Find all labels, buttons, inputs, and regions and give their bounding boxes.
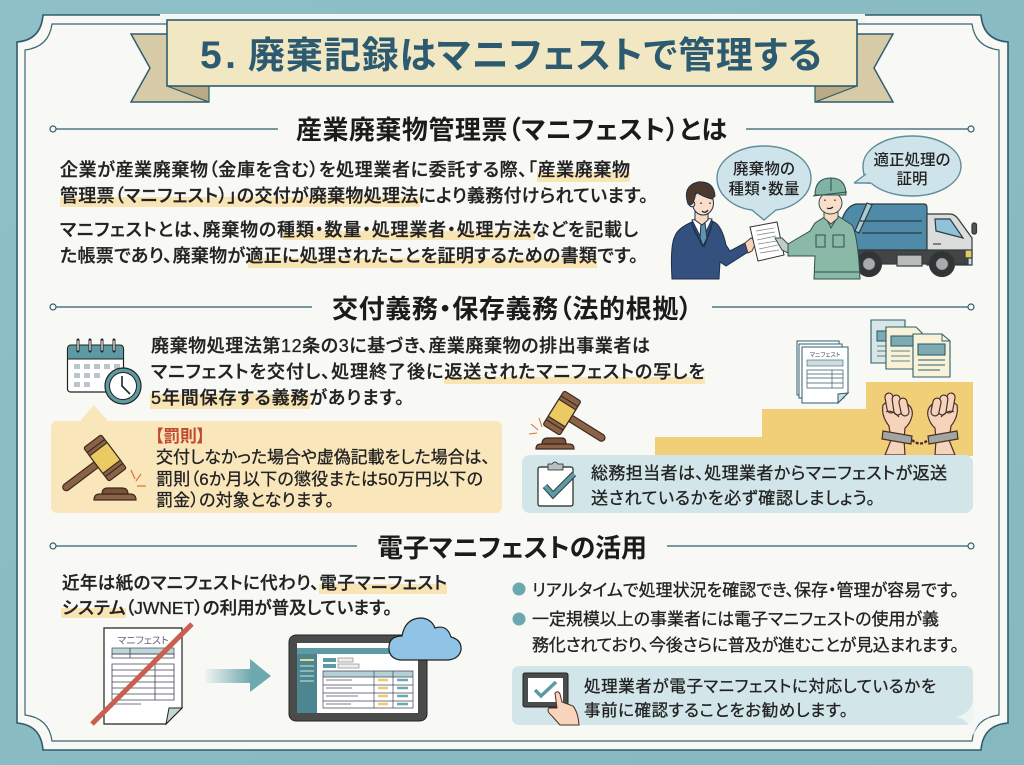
body text 3 <box>61 573 447 618</box>
section 3: electronic manifest <box>50 533 990 737</box>
icon: calendar and clock <box>68 340 141 404</box>
staircase <box>655 382 973 456</box>
penalty text: 罰金）の対象となります。 <box>156 491 334 510</box>
heading 1: 産業廃棄物管理票（マニフェスト）とは <box>296 115 727 145</box>
icon: manifest stack <box>797 341 848 403</box>
bullet list: 一定規模以上の事業者には電子マニフェストの使用が義 <box>532 609 939 629</box>
icon: manifest stack: マニフェスト <box>809 352 841 359</box>
right hand <box>928 392 957 455</box>
penalty text: 交付しなかった場合や虚偽記載をした場合は、 <box>156 448 490 467</box>
callout: penalty <box>51 405 502 513</box>
arrow <box>205 659 271 692</box>
heading 2 <box>50 294 974 324</box>
speech bubble: waste type and quantity: 種類・数量 <box>728 180 800 198</box>
callout: check contractor support: 処理業者が電子マニフェストに対応しているかを <box>584 677 936 696</box>
heading 3 <box>50 533 974 563</box>
icon: gavel (right) <box>529 391 615 456</box>
heading 1 <box>50 115 974 145</box>
body text 2 <box>150 336 705 409</box>
left hand <box>883 392 912 455</box>
speech bubble: proof of proper disposal: 証明 <box>896 170 928 188</box>
icon: handcuffed fists <box>882 392 958 455</box>
bullet list: リアルタイムで処理状況を確認でき、保存・管理が容易です。 <box>532 581 959 600</box>
penalty text: 【罰則】 <box>155 427 205 446</box>
body text 1: た帳票であり、廃棄物が適正に処理されたことを証明するための書類です。 <box>60 245 638 266</box>
illustration: garbage truck <box>841 203 976 276</box>
callout: check contractor support <box>512 666 973 725</box>
callout: confirm return <box>522 455 973 513</box>
speech bubble: proof of proper disposal <box>854 136 961 196</box>
illustration: handed-over document <box>750 222 784 261</box>
sparkle <box>956 697 990 737</box>
icon: gavel <box>51 435 146 506</box>
title text: 5. <box>200 34 236 77</box>
callout: check contractor support: 事前に確認することをお勧めします。 <box>584 701 848 720</box>
illustration: office worker <box>671 182 757 279</box>
heading 2: 交付義務・保存義務（法的根拠） <box>332 294 692 324</box>
body text 2: 廃棄物処理法第12条の3に基づき、産業廃棄物の排出事業者は <box>151 336 650 356</box>
icon: crossed-out paper manifest: マニフェスト <box>117 636 169 647</box>
body text 1 <box>60 159 648 268</box>
body text 2: 5年間保存する義務があります。 <box>151 387 404 408</box>
icon: documents <box>871 320 950 377</box>
icon: touch tablet <box>523 673 579 725</box>
penalty text: 罰則（6か月以下の懲役または50万円以下の <box>156 470 483 489</box>
body text 3: システム（JWNET）の利用が普及しています。 <box>62 598 392 618</box>
section 1: what is a manifest <box>50 115 976 279</box>
illustration: disposal contractor <box>775 178 860 279</box>
heading 3: 電子マニフェストの活用 <box>377 533 647 563</box>
title banner <box>131 20 893 102</box>
icon: crossed-out paper manifest <box>92 624 192 724</box>
speech bubble: waste type and quantity: 廃棄物の <box>733 160 795 178</box>
body text 1: 企業が産業廃棄物（金庫を含む）を処理業者に委託する際、「産業廃棄物 <box>60 159 630 180</box>
speech bubble: waste type and quantity <box>717 146 811 220</box>
section 2: legal duty <box>50 294 974 513</box>
callout: confirm return: 総務担当者は、処理業者からマニフェストが返送 <box>591 464 947 483</box>
body text 1: 管理票（マニフェスト）」の交付が廃棄物処理法により義務付けられています。 <box>60 185 648 206</box>
speech bubble: proof of proper disposal: 適正処理の <box>874 151 950 169</box>
body text 1: マニフェストとは、廃棄物の種類・数量・処理業者・処理方法などを記載し <box>60 220 638 240</box>
icon: tablet and cloud <box>289 618 461 721</box>
title text: 廃棄記録はマニフェストで管理する <box>248 35 822 76</box>
bullet list <box>512 581 959 655</box>
bullet list: 務化されており、今後さらに普及が進むことが見込まれます。 <box>532 636 959 655</box>
callout: confirm return: 送されているかを必ず確認しましょう。 <box>591 489 875 508</box>
penalty text <box>155 427 490 510</box>
body text 2: マニフェストを交付し、処理終了後に返送されたマニフェストの写しを <box>151 362 705 382</box>
icon: clipboard check <box>538 462 574 506</box>
body text 3: 近年は紙のマニフェストに代わり、電子マニフェスト <box>62 573 447 593</box>
